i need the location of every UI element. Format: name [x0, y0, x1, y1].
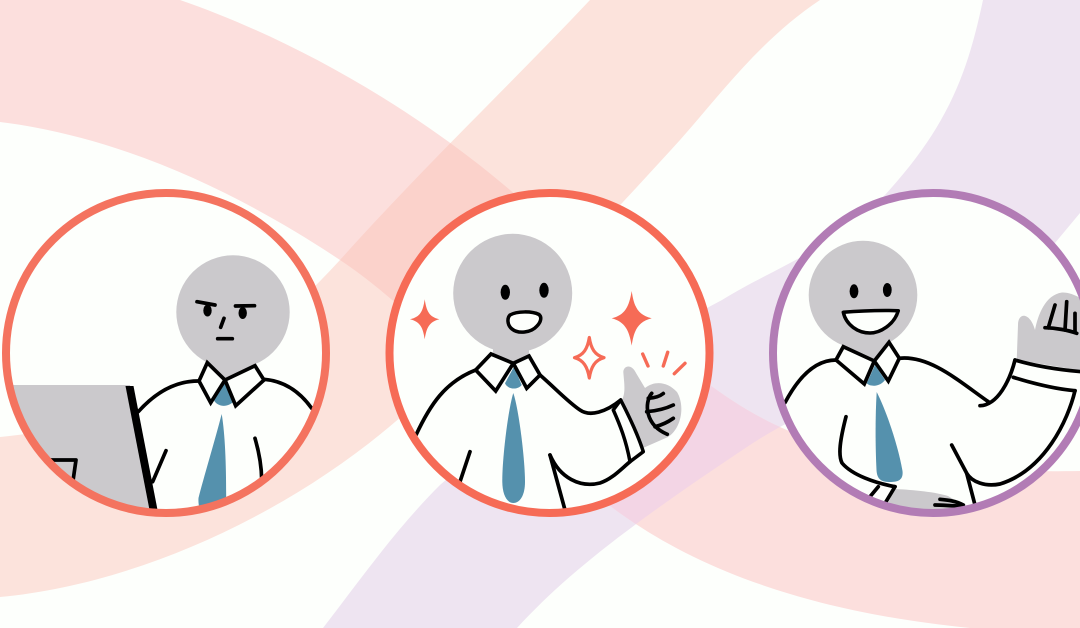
shirt	[138, 363, 312, 515]
sparkle: left	[410, 299, 439, 339]
hand: lower	[870, 487, 968, 512]
purple band	[323, 0, 1080, 628]
sparkle: large right	[612, 291, 652, 346]
cuff	[1013, 360, 1080, 391]
sparkle: outline	[574, 338, 604, 378]
cuff	[613, 400, 643, 462]
panel: serious worker at laptop	[0, 193, 326, 515]
panel: thumbs-up worker	[390, 193, 710, 513]
overlap: peach and pink	[340, 143, 513, 302]
ring	[6, 193, 326, 513]
head	[176, 255, 290, 382]
ring	[390, 193, 710, 513]
peach band	[0, 0, 820, 597]
hand: thumbs up	[622, 366, 681, 448]
overlap: purple and pink	[610, 386, 779, 524]
laptop	[13, 385, 158, 509]
head	[453, 234, 572, 365]
shirt	[416, 354, 630, 510]
hand: waving	[1017, 292, 1080, 372]
panel: waving worker	[773, 193, 1080, 513]
motion ticks	[643, 352, 685, 374]
head	[809, 241, 917, 362]
shirt	[785, 342, 1075, 505]
ring	[773, 193, 1080, 513]
